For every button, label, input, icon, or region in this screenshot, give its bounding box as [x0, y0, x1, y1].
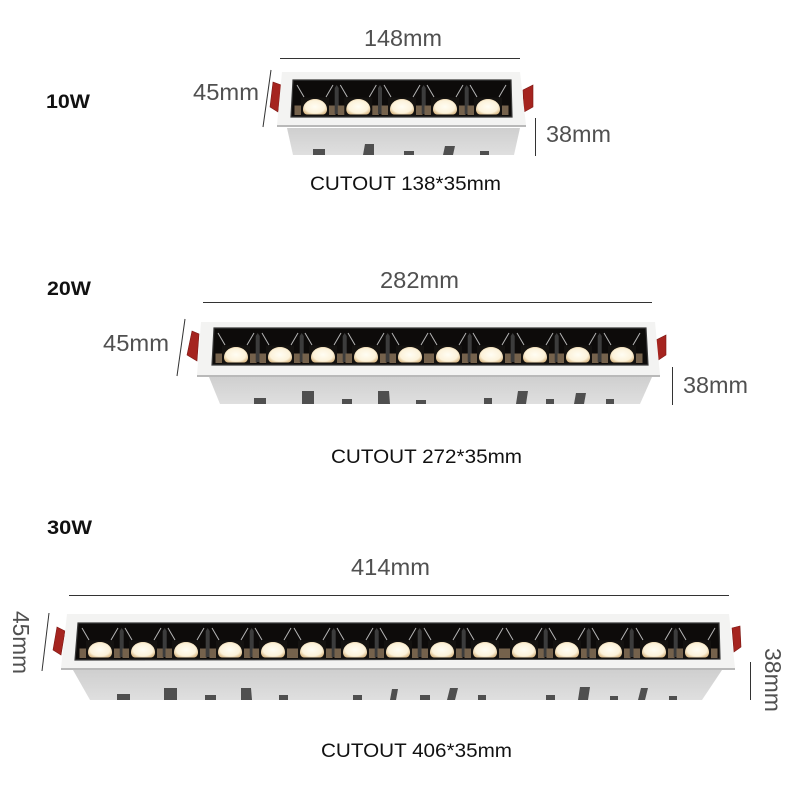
- height dimension: 45mm (30W), rotated: 45mm: [8, 611, 34, 674]
- height dimension: 45mm (10W): [193, 70, 271, 127]
- label: 10W: 10W: [46, 92, 90, 113]
- cutout caption: 406*35mm: CUTOUT 406*35mm: [321, 741, 512, 762]
- height dimension: 45mm (20W): [103, 319, 185, 376]
- width dimension: 148mm: 148mm: [364, 25, 442, 51]
- product: 30W linear downlight: [53, 614, 741, 700]
- depth dimension: 38mm (20W): 38mm: [683, 372, 748, 398]
- width dimension: 414mm: 414mm: [351, 554, 430, 580]
- depth dimension: 38mm (10W): 38mm: [546, 121, 611, 147]
- height dimension: 45mm (20W): 45mm: [103, 330, 169, 356]
- depth dimension: 38mm (10W): [536, 118, 611, 156]
- product: 10W linear downlight: [270, 72, 533, 155]
- cutout caption: 272*35mm: CUTOUT 272*35mm: [331, 447, 522, 468]
- depth dimension: 38mm (20W): [672, 367, 748, 405]
- product: 20W linear downlight: [187, 322, 666, 404]
- height dimension: 45mm (30W), rotated: [8, 611, 49, 674]
- height dimension: 45mm (10W): 45mm: [193, 79, 259, 105]
- width dimension: 282mm: 282mm: [380, 267, 459, 293]
- label: 30W: 30W: [47, 518, 92, 539]
- label: 20W: 20W: [47, 279, 91, 300]
- depth dimension: 38mm (30W), rotated: 38mm: [760, 648, 786, 712]
- cutout caption: 138*35mm: CUTOUT 138*35mm: [310, 174, 501, 195]
